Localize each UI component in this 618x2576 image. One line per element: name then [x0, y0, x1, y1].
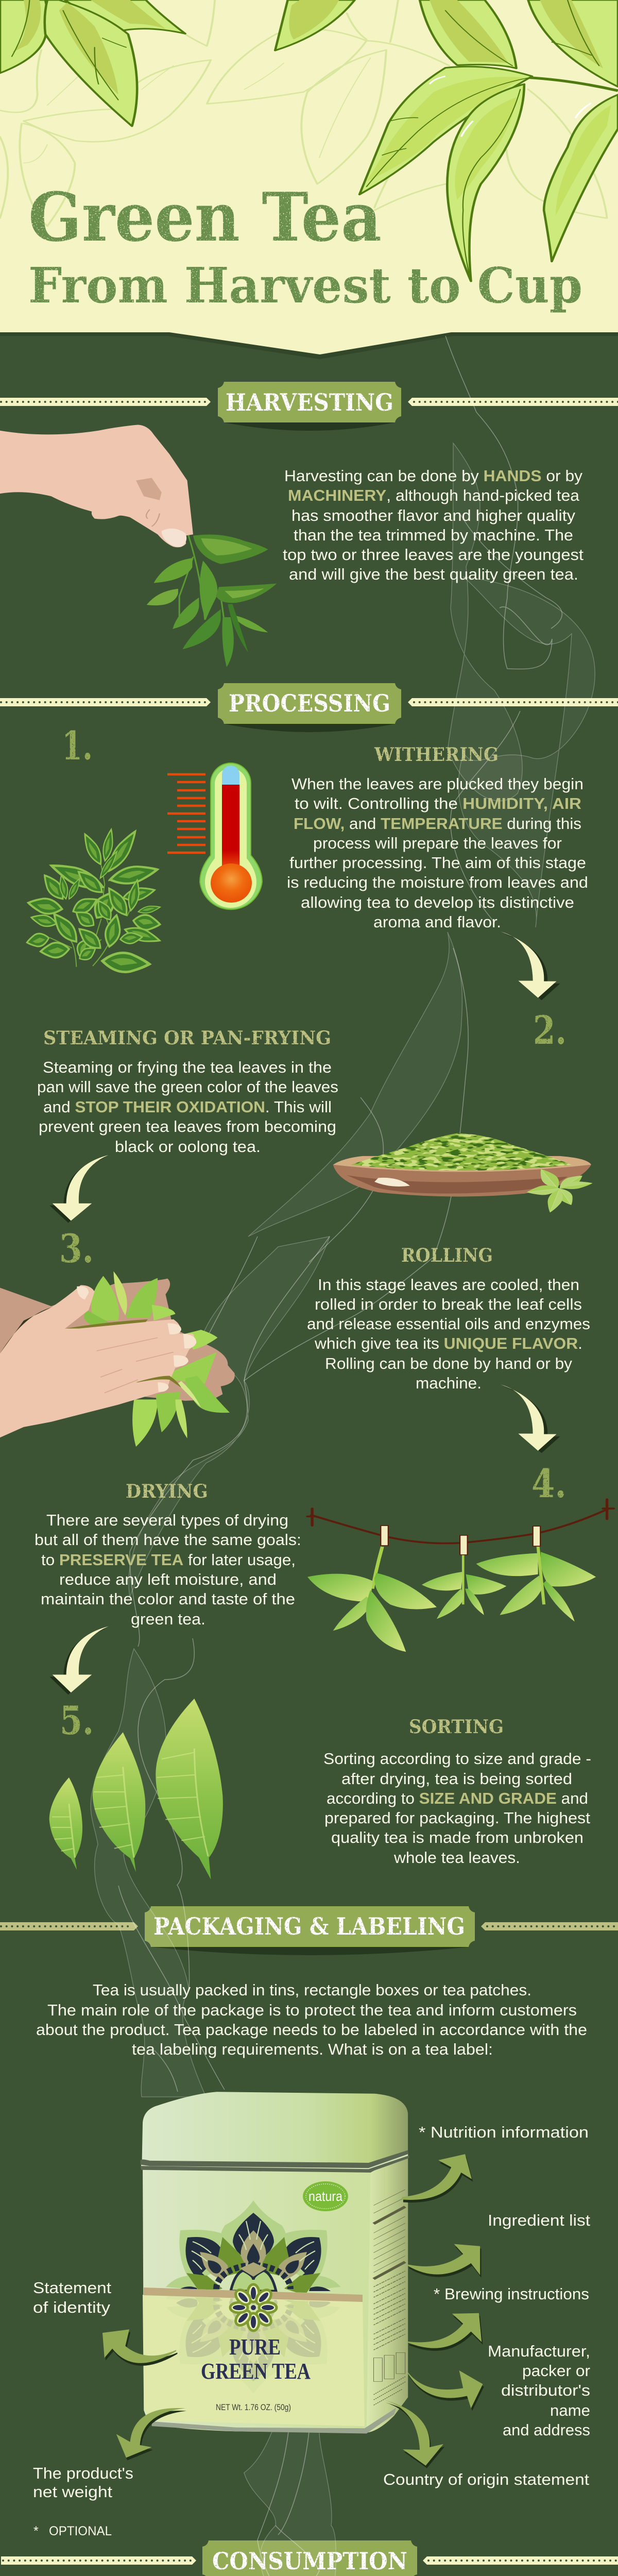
text block: withering: FLOW, and TEMPERATURE during this [294, 815, 581, 833]
text block: drying: to PRESERVE TEA for later usage, [41, 1551, 296, 1569]
illustration: foreground tea leaves [0, 0, 618, 281]
tin body and lid [140, 2092, 409, 2433]
text block: steaming: and STOP THEIR OXIDATION. This will [43, 1098, 332, 1116]
text block: withering: to wilt. Controlling the HUMIDITY, AIR [295, 794, 581, 812]
divider: packaging rule [0, 1922, 618, 1930]
arrows: tin label callouts [102, 2154, 484, 2468]
net weight: NET Wt. 1.76 OZ. (50g) [216, 2402, 291, 2412]
clothespins [381, 1526, 540, 1555]
arrow: withering to step 2 [501, 931, 560, 1000]
illustration: tea leaves drying on a line [307, 1499, 614, 1652]
text block: packaging intro: The main role of the package is to protect the tea and inform customers [47, 2001, 577, 2019]
mandala emblem [166, 2200, 341, 2295]
heading banner: harvesting [218, 382, 401, 431]
text block: withering [287, 775, 588, 931]
divider: processing rule [0, 698, 618, 706]
labels: tin callout text: Manufacturer, [488, 2342, 590, 2360]
natura badge: natura [308, 2189, 343, 2204]
text block: rolling: Rolling can be done by hand or by [325, 1354, 573, 1372]
arrow: steaming to step 3 [49, 1155, 108, 1223]
labels: tin callout text: packer or [522, 2362, 590, 2380]
illustration: hand picking a tea sprig [0, 425, 277, 667]
title: Green Tea [28, 178, 382, 257]
text block: sorting: according to SIZE AND GRADE and [327, 1789, 588, 1807]
heading banner: processing: PROCESSING [229, 689, 390, 717]
leaf sprigs [307, 1547, 596, 1652]
text block: drying: maintain the color and taste of the [41, 1590, 295, 1608]
text block: drying [35, 1511, 301, 1628]
back hand [0, 1279, 235, 1401]
text block: steaming: Steaming or frying the tea leaves in the [43, 1058, 332, 1076]
illustration: tea bush [24, 825, 163, 975]
text block: rolling: and release essential oils and enzymes [307, 1315, 590, 1333]
step heading: rolling: ROLLING [401, 1245, 493, 1266]
text block: sorting: whole tea leaves. [393, 1849, 520, 1867]
natura badge [303, 2181, 348, 2211]
text block: rolling: rolled in order to break the leaf cells [315, 1295, 582, 1313]
illustration: faint background leaf outlines [0, 0, 607, 226]
text block: withering: aroma and flavor. [373, 913, 501, 931]
labels: tin callout text [33, 2123, 590, 2501]
number: step 2: 2. [533, 1007, 566, 1053]
footnote: optional: OPTIONAL [49, 2524, 112, 2538]
arrow: drying to step 5 [49, 1626, 108, 1694]
text block: drying: green tea. [131, 1610, 205, 1628]
front hand [0, 1285, 195, 1437]
text block: harvesting: top two or three leaves are the youngest [283, 546, 583, 564]
title [28, 178, 582, 314]
product name: PURE [229, 2334, 281, 2360]
text block: harvesting: has smoother flavor and higher quality [291, 506, 576, 524]
text block: sorting [323, 1750, 591, 1867]
label strip [144, 2287, 363, 2302]
number: step 5: 5. [60, 1698, 94, 1743]
side nutrition panel [374, 2190, 406, 2405]
icon: thermometer [167, 763, 262, 909]
text block: harvesting: and will give the best quality green tea. [289, 565, 578, 583]
product name [201, 2334, 311, 2384]
labels: tin callout text: Statement [33, 2279, 111, 2297]
text block: harvesting: than the tea trimmed by machine. The [294, 526, 573, 544]
illustration: three sorted tea leaves [49, 1699, 223, 1879]
illustration: bowl of tea leaves [333, 1133, 594, 1214]
text block: withering: further processing. The aim of this stage [289, 854, 586, 872]
title: From Harvest to Cup [28, 257, 582, 314]
text block: rolling: machine. [416, 1374, 482, 1392]
labels: tin callout text: distributor's [501, 2381, 590, 2399]
hand [0, 425, 193, 547]
labels: tin callout text: Country of origin statement [383, 2470, 589, 2488]
labels: tin callout text: net weight [33, 2483, 112, 2501]
divider: harvesting rule [0, 398, 618, 406]
text block: packaging intro: tea labeling requirements. What is on a tea label: [132, 2040, 493, 2058]
text block: sorting: after drying, tea is being sorted [341, 1770, 572, 1788]
text block: harvesting: MACHINERY, although hand-picked tea [288, 486, 580, 504]
heading banner: processing [218, 683, 401, 732]
central flower [230, 2284, 277, 2331]
text block: steaming: black or oolong tea. [115, 1138, 261, 1156]
text block: withering: allowing tea to develop its distinctive [301, 893, 574, 911]
heading banner: packaging and labeling: PACKAGING & LABELING [153, 1912, 465, 1940]
text block: withering: is reducing the moisture from leaves and [287, 873, 588, 891]
text block: steaming: pan will save the green color of the leaves [37, 1078, 338, 1096]
tea sprig [147, 534, 277, 667]
text block: sorting: quality tea is made from unbroken [331, 1828, 583, 1846]
product name: GREEN TEA [201, 2359, 311, 2384]
text block: steaming [37, 1058, 338, 1156]
text block: rolling: which give tea its UNIQUE FLAVOR. [314, 1334, 582, 1352]
labels: tin callout text: of identity [33, 2298, 111, 2316]
text block: drying: reduce any left moisture, and [59, 1570, 277, 1588]
text block: steaming: prevent green tea leaves from becoming [39, 1117, 336, 1136]
leaf bunch [84, 1271, 230, 1447]
text block: harvesting: Harvesting can be done by HANDS or by [284, 467, 583, 485]
number: step 3: 3. [59, 1226, 94, 1272]
text block: packaging intro: Tea is usually packed in tins, rectangle boxes or tea patches. [93, 1981, 531, 1999]
header panel [0, 0, 618, 359]
heading banner: packaging and labeling [145, 1906, 475, 1955]
labels: tin callout text: and address [503, 2421, 590, 2439]
heading banner: harvesting: HARVESTING [226, 388, 393, 416]
text block: withering: When the leaves are plucked they begin [291, 775, 583, 793]
step heading: drying: DRYING [126, 1481, 208, 1502]
text block: rolling [307, 1276, 590, 1392]
illustration: green tea tin [140, 2092, 409, 2433]
arrow: rolling to step 4 [501, 1384, 560, 1453]
text block: harvesting [283, 467, 583, 583]
step heading: sorting: SORTING [409, 1716, 504, 1738]
labels: tin callout text: * Brewing instructions [434, 2285, 589, 2303]
text block: withering: process will prepare the leaves for [313, 834, 562, 852]
labels: tin callout text: The product's [33, 2464, 133, 2482]
heading banner: consumption: CONSUMPTION [212, 2547, 407, 2575]
labels: tin callout text: Ingredient list [488, 2211, 590, 2229]
text block: packaging intro [36, 1981, 587, 2058]
divider: consumption rule [1, 2556, 618, 2565]
drying rope [307, 1499, 614, 1544]
text block: drying: but all of them have the same goals: [35, 1531, 301, 1549]
faded mandala [176, 2297, 331, 2381]
decorative steam trail [91, 336, 595, 2576]
text block: sorting: Sorting according to size and grade - [323, 1750, 591, 1768]
number: step 1: 1. [62, 723, 93, 769]
labels: tin callout text: * Nutrition information [419, 2123, 589, 2141]
step heading: steaming or pan-frying: STEAMING OR PAN-FRYING [43, 1027, 331, 1049]
text block: packaging intro: about the product. Tea package needs to be labeled in accordance with the [36, 2021, 587, 2039]
labels: tin callout text: name [550, 2401, 590, 2419]
text block: drying: There are several types of drying [46, 1511, 288, 1529]
text block: sorting: prepared for packaging. The highest [324, 1809, 590, 1827]
text block: rolling: In this stage leaves are cooled, then [318, 1276, 579, 1294]
step heading: withering: WITHERING [374, 744, 499, 766]
number: step 4: 4. [531, 1461, 566, 1506]
footnote: optional: * [33, 2524, 39, 2538]
illustration: hands rolling tea leaves [0, 1271, 235, 1447]
